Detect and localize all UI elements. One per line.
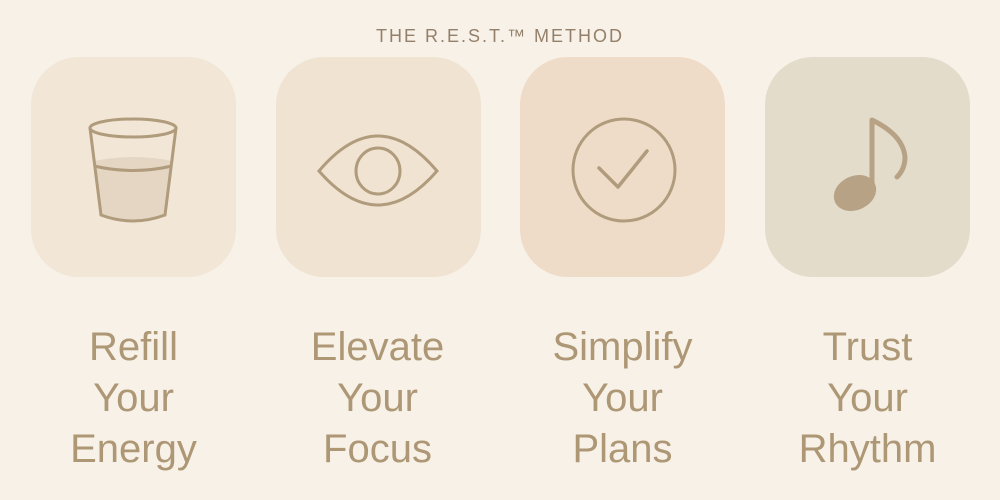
label: simplify: Simplify — [552, 325, 693, 369]
icon: music note — [834, 118, 908, 211]
label: trust: Rhythm — [799, 427, 936, 471]
panel: trust tile — [765, 57, 970, 277]
label: elevate: Focus — [323, 427, 432, 471]
panel: refill tile — [31, 57, 236, 277]
label: simplify: Plans — [572, 427, 673, 471]
label: trust: Your — [827, 376, 908, 420]
label: refill: Refill — [89, 325, 178, 369]
label: refill — [70, 325, 197, 471]
label: refill: Your — [93, 376, 174, 420]
label: simplify: Your — [582, 376, 663, 420]
title: THE R.E.S.T.™ METHOD — [376, 26, 624, 46]
icon: check circle — [572, 118, 676, 222]
label: elevate: Elevate — [311, 325, 444, 369]
label: elevate — [311, 325, 444, 471]
label: elevate: Your — [337, 376, 418, 420]
icon: eye — [317, 134, 439, 206]
label: refill: Energy — [70, 427, 197, 471]
panel: elevate tile — [276, 57, 481, 277]
panel: simplify tile — [520, 57, 725, 277]
label: simplify — [552, 325, 693, 471]
label: trust: Trust — [823, 325, 912, 369]
label: trust — [799, 325, 936, 471]
icon: glass of water — [88, 118, 178, 222]
